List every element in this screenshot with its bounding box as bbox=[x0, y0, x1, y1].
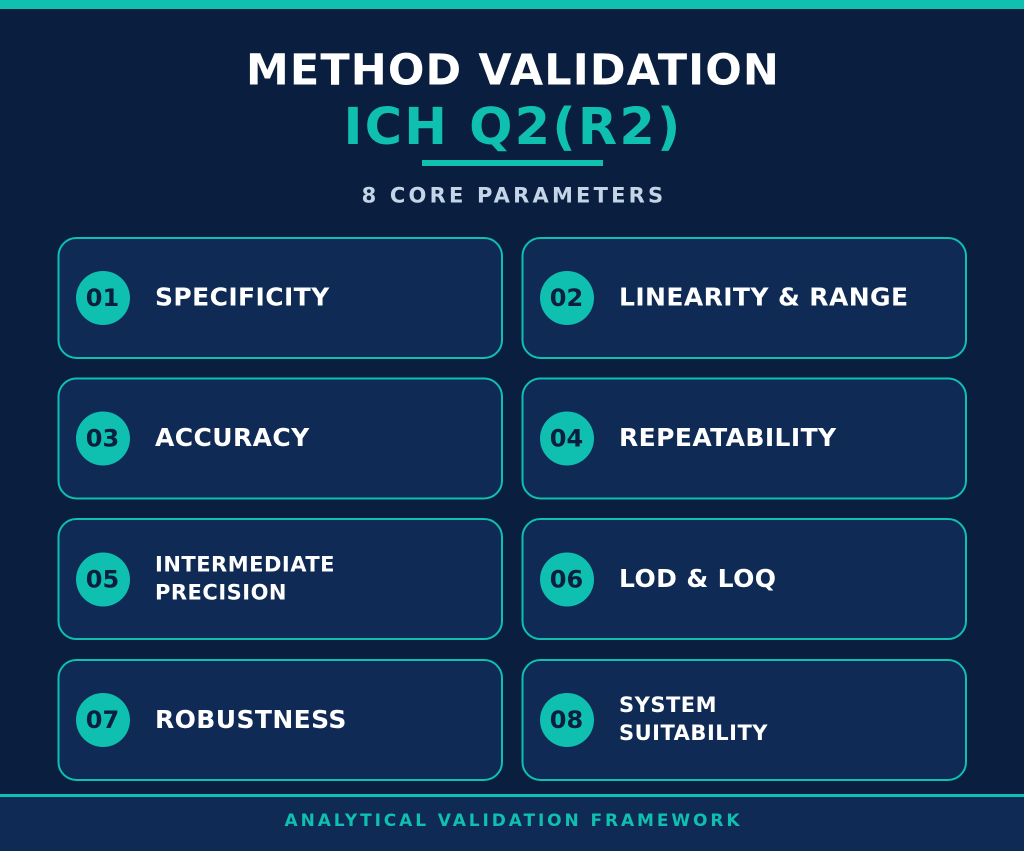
footer text: ANALYTICAL VALIDATION FRAMEWORK bbox=[285, 811, 742, 831]
top accent bar bbox=[0, 0, 1024, 9]
card 07: robustness: ROBUSTNESS bbox=[155, 705, 347, 734]
card 08: system suitability: SUITABILITY bbox=[619, 721, 768, 745]
card 07: robustness: 07 bbox=[86, 706, 119, 734]
subtitle: ICH Q2(R2): ICH Q2(R2) bbox=[343, 98, 683, 157]
card 04: repeatability: 04 bbox=[550, 424, 583, 452]
card 07: robustness bbox=[58, 660, 502, 780]
card 04: repeatability bbox=[522, 378, 966, 498]
card 01: specificity: SPECIFICITY bbox=[155, 282, 330, 312]
card 03: accuracy bbox=[58, 378, 502, 498]
card 04: repeatability: REPEATABILITY bbox=[619, 423, 837, 452]
card 01: specificity: 01 bbox=[86, 284, 119, 312]
tagline: 8 CORE PARAMETERS bbox=[362, 184, 666, 208]
card 08: system suitability: 08 bbox=[550, 706, 583, 734]
card 02: linearity and range bbox=[522, 238, 966, 358]
card 05: intermediate precision: PRECISION bbox=[155, 580, 287, 604]
card 01: specificity bbox=[58, 238, 502, 358]
card 05: intermediate precision bbox=[58, 519, 502, 639]
card 08: system suitability bbox=[522, 660, 966, 780]
card 03: accuracy: ACCURACY bbox=[155, 423, 310, 452]
card 06: LOD and LOQ bbox=[522, 519, 966, 639]
card 06: LOD and LOQ: 06 bbox=[550, 566, 583, 594]
footer band bbox=[0, 794, 1024, 851]
card 05: intermediate precision: 05 bbox=[86, 566, 119, 594]
card 03: accuracy: 03 bbox=[86, 424, 119, 452]
card 08: system suitability: SYSTEM bbox=[619, 693, 717, 717]
title: METHOD VALIDATION bbox=[246, 46, 780, 96]
title underline bbox=[422, 160, 603, 166]
card 02: linearity and range: LINEARITY & RANGE bbox=[619, 282, 908, 312]
card 05: intermediate precision: INTERMEDIATE bbox=[155, 552, 335, 576]
card 06: LOD and LOQ: LOD & LOQ bbox=[619, 564, 776, 593]
card 02: linearity and range: 02 bbox=[550, 284, 583, 312]
